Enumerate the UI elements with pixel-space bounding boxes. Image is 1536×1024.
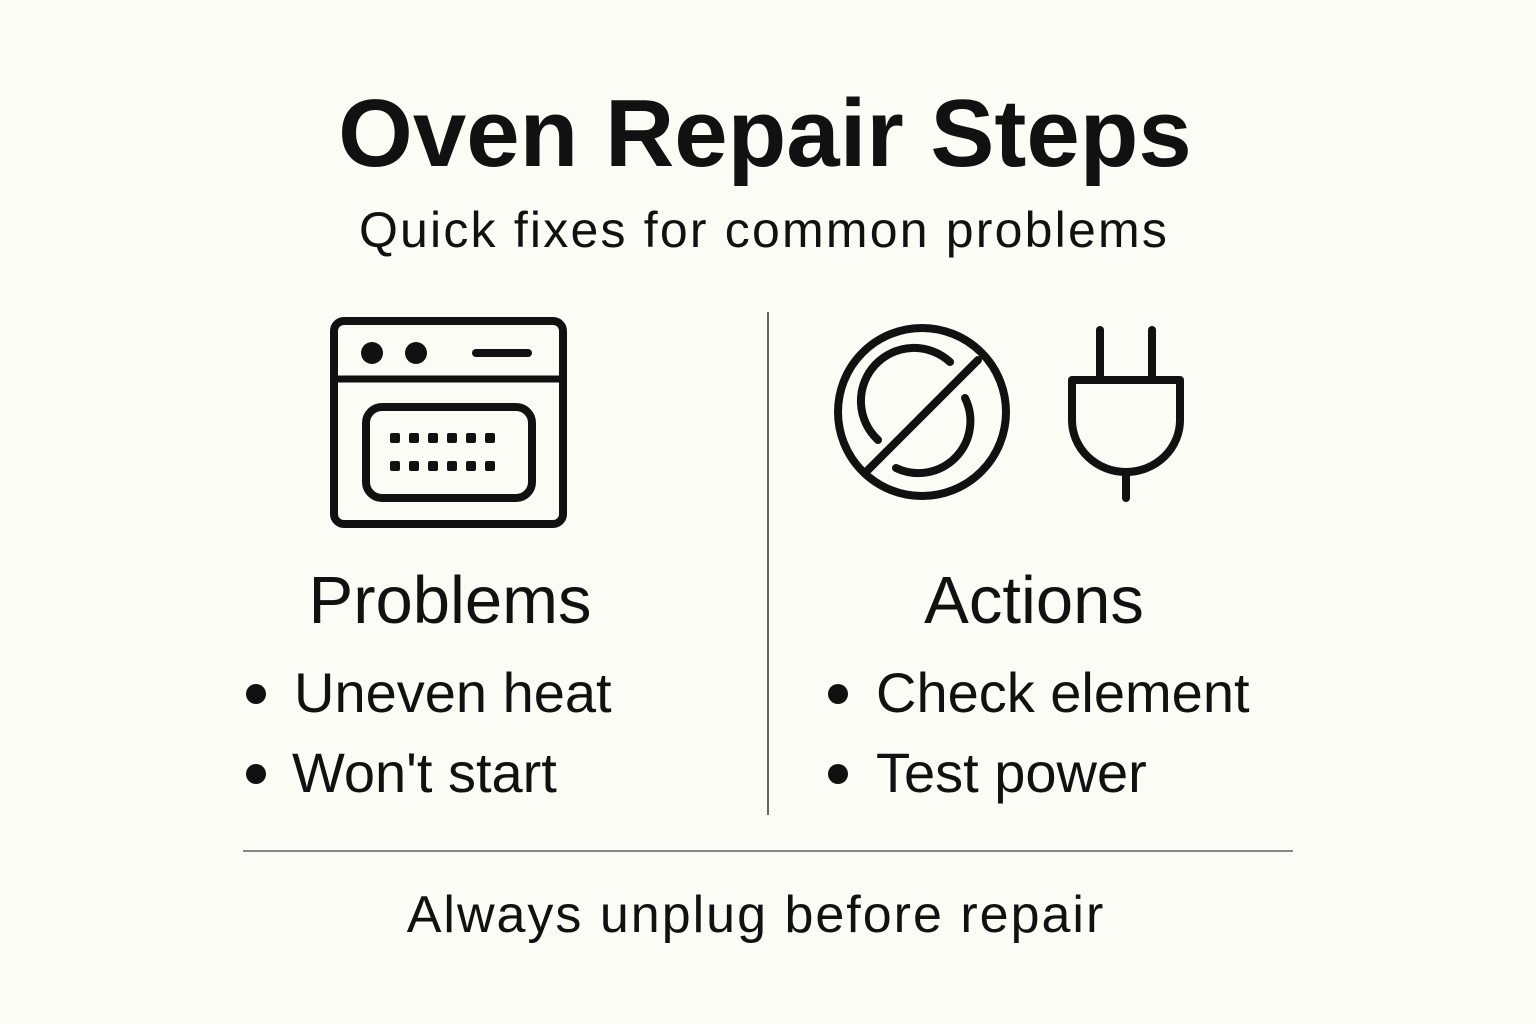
icon: no-heat symbol [834, 324, 1010, 500]
icon: plug [1068, 326, 1184, 502]
title: Oven Repair Steps [338, 80, 1192, 187]
list: actions: Check element [876, 661, 1250, 724]
list: problems: Won't start [292, 741, 557, 804]
list: actions: Test power [876, 741, 1147, 804]
list: actions [828, 661, 1250, 804]
list: problems [246, 661, 612, 804]
subtitle: Quick fixes for common problems [359, 202, 1169, 258]
footer note: Always unplug before repair [407, 886, 1105, 944]
heading: Actions: Actions [924, 563, 1144, 638]
heading: Problems: Problems [309, 563, 591, 638]
icon: oven [330, 317, 567, 528]
list: problems: Uneven heat [294, 661, 612, 724]
